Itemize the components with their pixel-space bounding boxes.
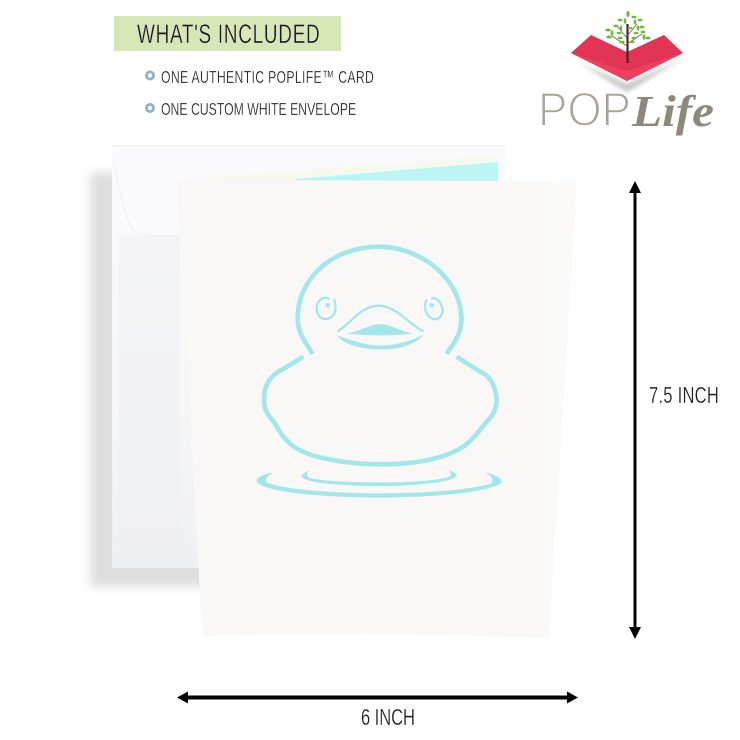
duck beak bbox=[337, 306, 423, 331]
envelope inner strip bbox=[118, 236, 180, 568]
card front bbox=[177, 180, 577, 639]
envelope shadow bbox=[90, 172, 220, 587]
logo open book bbox=[571, 35, 683, 81]
logo tree bbox=[605, 11, 651, 63]
duck body bbox=[264, 357, 497, 464]
arrow: width dimension bbox=[177, 692, 578, 704]
logo: PopLife bbox=[538, 11, 714, 136]
item 2 text: ONE CUSTOM WHITE ENVELOPE bbox=[161, 100, 356, 120]
arrow: height dimension bbox=[629, 181, 641, 639]
logo wordmark POP: POP bbox=[538, 82, 631, 136]
heading text: WHAT'S INCLUDED bbox=[137, 19, 320, 49]
logo shadow bbox=[578, 58, 684, 92]
bullet 2 bbox=[146, 104, 154, 112]
envelope body bbox=[112, 145, 505, 568]
label: 6 inch: 6 INCH bbox=[361, 705, 415, 731]
envelope flap bbox=[113, 147, 505, 236]
ripple outer bbox=[257, 472, 502, 498]
heading background bbox=[114, 16, 341, 51]
list: included items bbox=[146, 68, 374, 120]
logo wordmark Life: Life bbox=[631, 87, 714, 136]
duck mouth bbox=[347, 324, 413, 335]
card back sheet bbox=[177, 155, 498, 183]
duck cut-out illustration bbox=[257, 247, 502, 498]
card inner blue sheet bbox=[295, 162, 498, 183]
envelope bbox=[112, 145, 505, 568]
bullet 1 bbox=[146, 72, 154, 79]
panel: what's included heading bbox=[114, 16, 341, 51]
duck right eye bbox=[425, 298, 443, 319]
item 1 text: ONE AUTHENTIC POPLIFE™ CARD bbox=[161, 68, 374, 88]
ripple inner bbox=[302, 470, 457, 486]
duck left eye bbox=[317, 298, 336, 319]
label: 7.5 inch: 7.5 INCH bbox=[649, 383, 719, 409]
duck lower bill bbox=[337, 335, 423, 349]
duck head bbox=[298, 247, 461, 354]
